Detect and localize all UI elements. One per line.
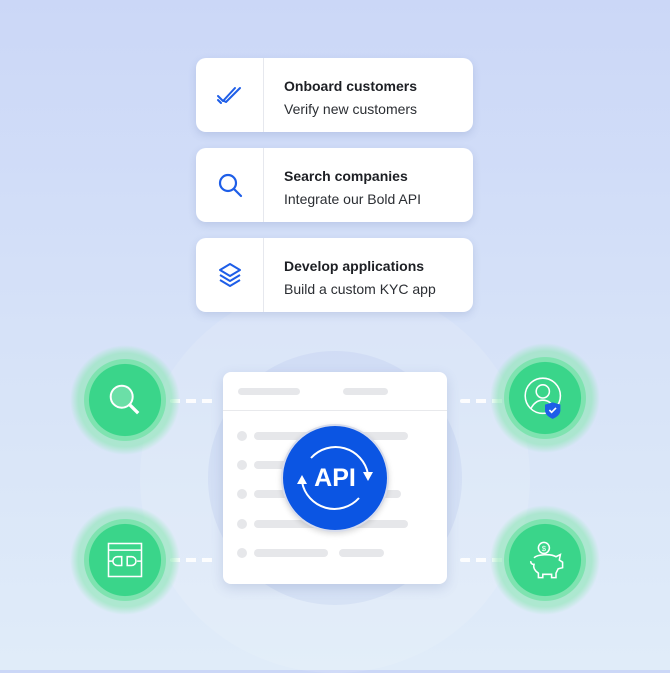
card: develop applications: Build a custom KYC app [284,281,436,297]
icon: magnifier [218,174,242,198]
card: onboard customers: Onboard customers [284,78,417,94]
document panel [223,372,447,584]
card: onboard customers [196,58,473,132]
card: search companies: Search companies [284,168,408,184]
card: onboard customers: Verify new customers [284,101,417,117]
icon: layers [219,263,241,287]
green icon: plugin browser [70,505,180,615]
card: search companies [196,148,473,222]
card: develop applications: Develop applications [284,258,424,274]
card: develop applications [196,238,473,312]
dashed connectors [170,399,214,403]
green icon: user verified [490,343,600,453]
green icon: piggy bank [490,505,600,615]
API badge: API [314,464,356,492]
icon: double check [217,87,241,104]
API badge [281,424,389,532]
background rings [140,283,530,673]
green icon: search data [70,345,180,455]
green icon: piggy bank: $ [542,544,547,553]
card: search companies: Integrate our Bold API [284,191,421,207]
